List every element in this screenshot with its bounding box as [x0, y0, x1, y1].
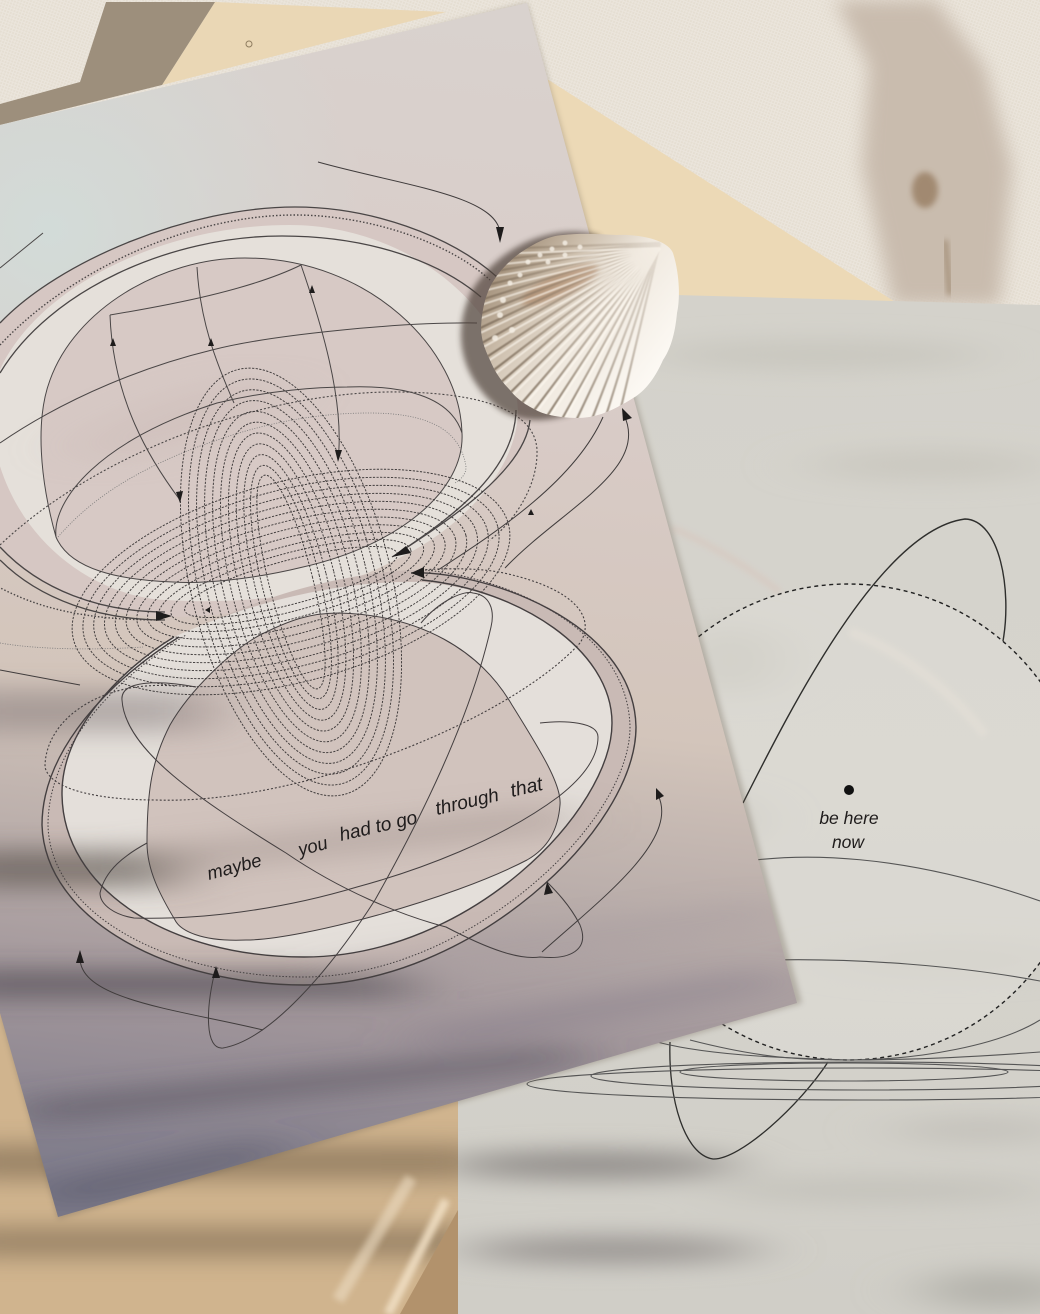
- arrows: curved arrows on left card: [0, 162, 662, 1030]
- lower rings: [42, 573, 636, 985]
- text block: be here now: be here: [819, 808, 879, 828]
- lower orbit loop: [670, 1042, 828, 1159]
- text block: be here now: now: [832, 832, 865, 852]
- outer rings: [0, 207, 530, 620]
- shell ribs: [481, 240, 661, 418]
- shell shadow: [461, 232, 600, 420]
- text block: maybe you had to go through that: had to go: [337, 808, 419, 846]
- thin dotted ellipse: [0, 413, 466, 649]
- rainbow light streak: [672, 528, 985, 735]
- globe outline: [41, 258, 462, 582]
- panel: right card: [440, 293, 1040, 1314]
- text block: maybe you had to go through that: that: [508, 773, 546, 802]
- concentric tall dashed ellipses: [141, 345, 441, 819]
- text block: maybe you had to go through that: you: [294, 832, 330, 860]
- big dashed ellipse: [0, 392, 537, 545]
- lower ring fill: [42, 570, 636, 985]
- text block: maybe you had to go through that: through: [433, 785, 501, 820]
- shell body: [481, 234, 679, 418]
- cast light and shadow bands: [0, 678, 772, 1206]
- chart: lower ring diagram on left card: [42, 569, 636, 1048]
- chart: right card orbit diagram: [527, 519, 1040, 1159]
- text block: maybe you had to go through that: [205, 773, 546, 884]
- text block: be here now: [819, 785, 879, 852]
- lower dashed ellipse: [45, 569, 585, 800]
- text block: maybe you had to go through that: maybe: [205, 849, 264, 884]
- dotted ring: [0, 215, 490, 620]
- upper ring fill: [0, 207, 530, 617]
- flat ellipses: [527, 857, 1040, 1100]
- panel: left card: [0, 3, 802, 1219]
- arrowheads: [76, 227, 664, 978]
- upper orbit loop: [743, 519, 1006, 803]
- icon: seashell: [457, 228, 679, 424]
- lower dotted ring: [48, 570, 630, 977]
- dashed circle: [610, 584, 1040, 1060]
- globe grid lines: [0, 265, 477, 500]
- concentric flat dashed ellipses: [48, 427, 534, 737]
- chart: upper sphere diagram on left card: [0, 207, 537, 819]
- lower orbit loops: [100, 592, 598, 1048]
